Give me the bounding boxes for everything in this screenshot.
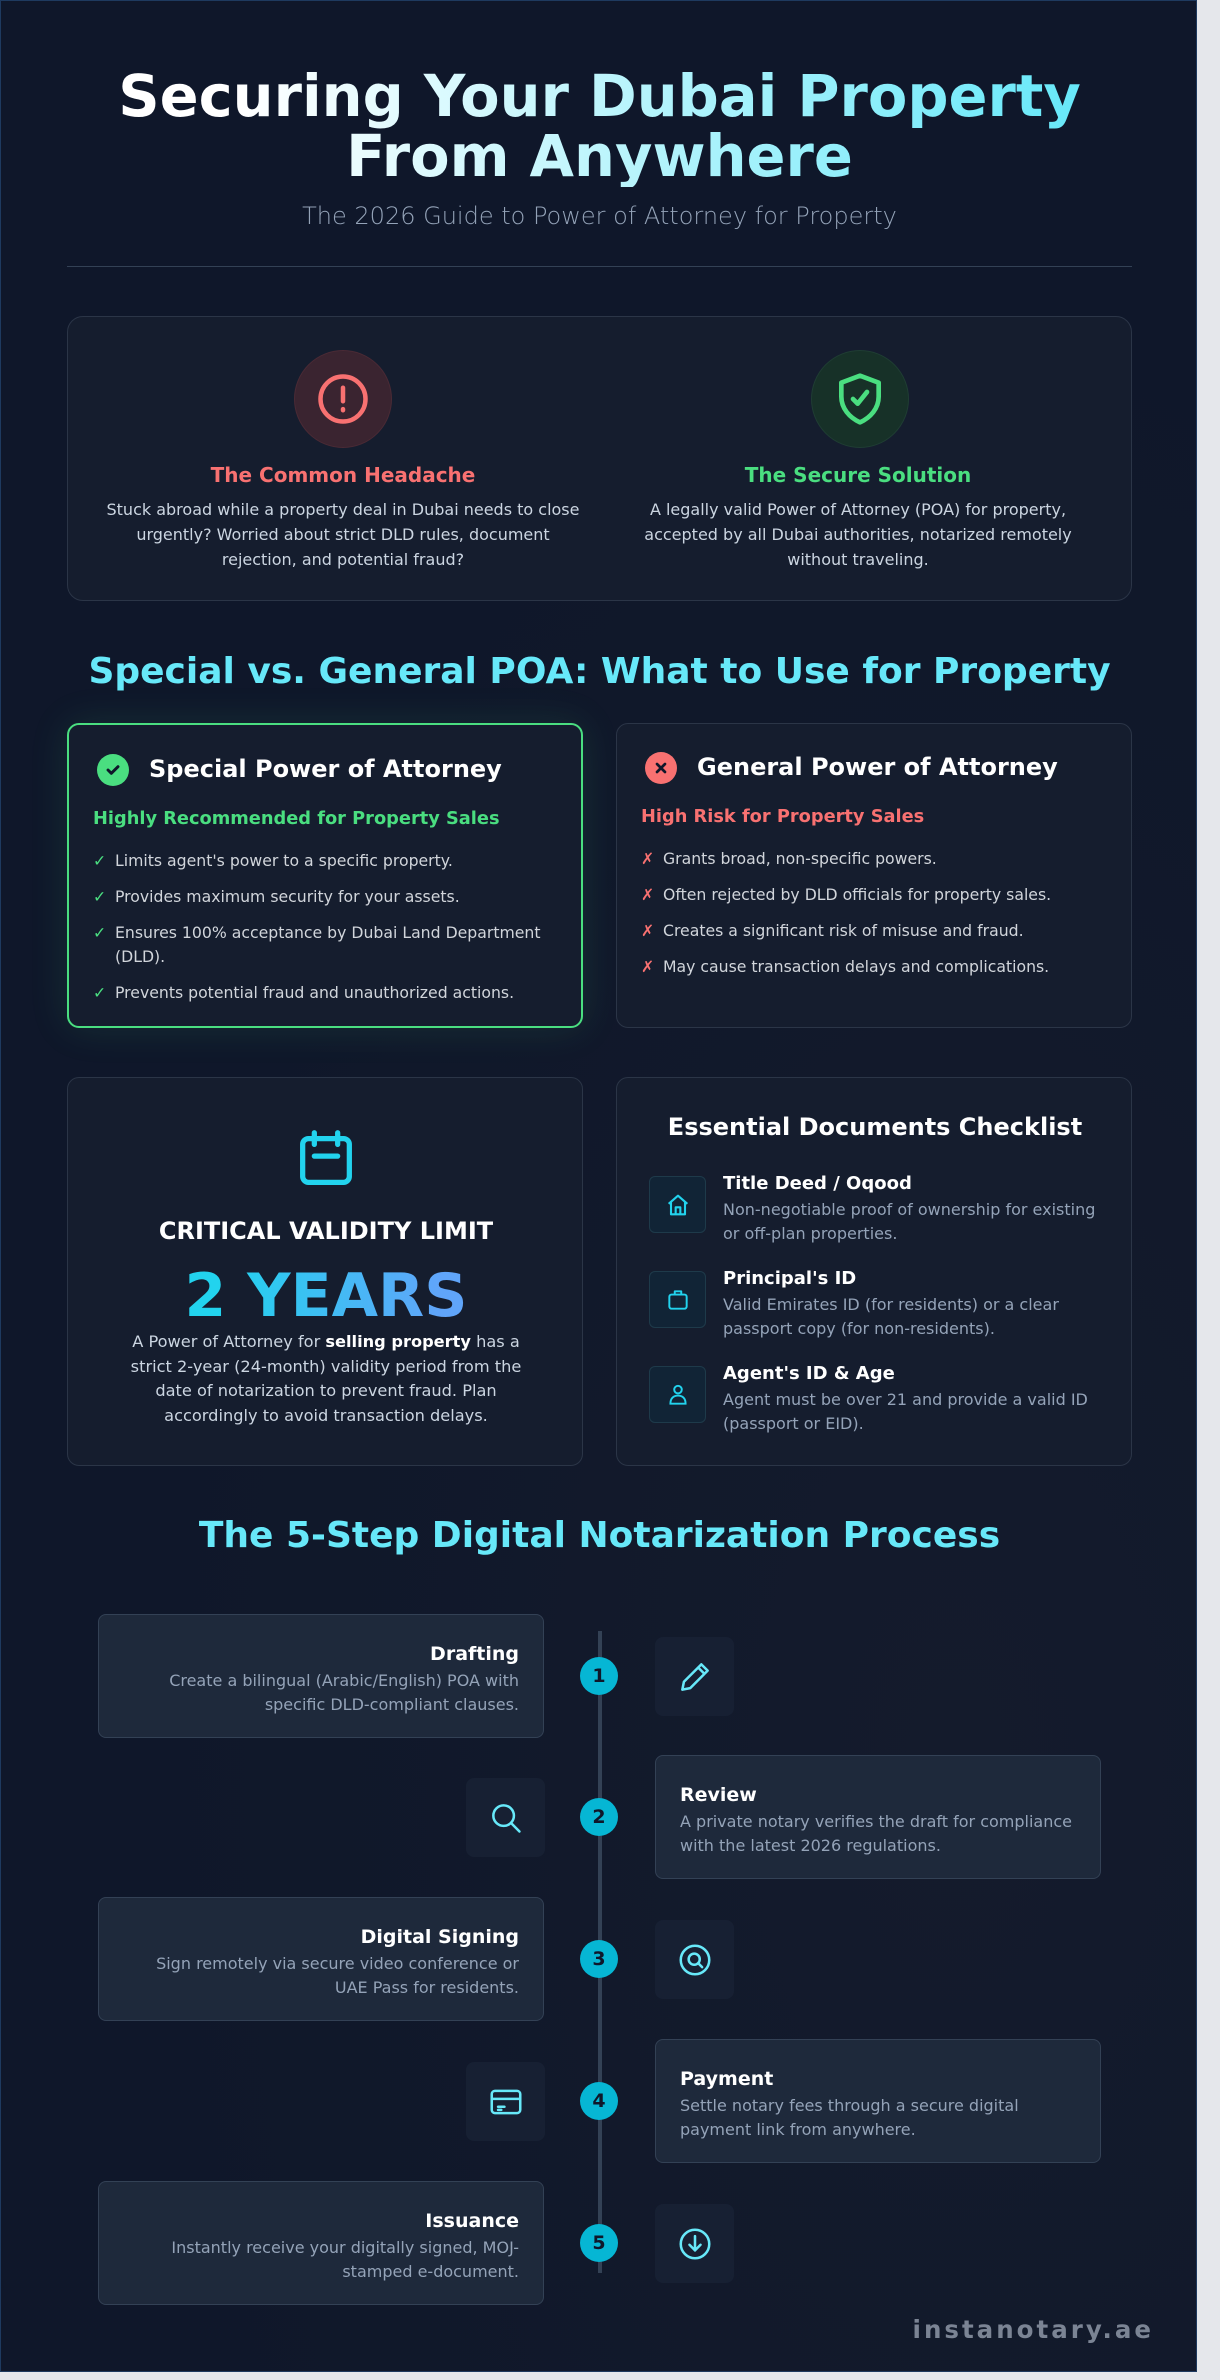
icon: check — [97, 754, 129, 786]
step 1: Drafting — [430, 1643, 519, 1665]
subtitle: The 2026 Guide to Power of Attorney for Property — [302, 202, 897, 230]
heading: special vs general: Special vs. General POA: What to Use for Property — [88, 651, 1111, 692]
panel: general POA — [616, 723, 1132, 1028]
step 4 — [466, 2039, 1101, 2163]
list: ✓ — [93, 887, 106, 906]
step 1: 1 — [592, 1665, 606, 1687]
list: ✗ — [641, 921, 654, 940]
subheading: Highly Recommended for Property Sales — [93, 808, 500, 829]
doc item: title deed — [649, 1173, 1095, 1243]
step 3: Sign remotely via secure video conference or UAE Pass for residents. — [156, 1954, 519, 1997]
title — [1, 67, 1198, 187]
list: Ensures 100% acceptance by Dubai Land Department (DLD). — [115, 923, 541, 966]
icon: shield — [811, 350, 909, 448]
step 2 — [466, 1755, 1101, 1879]
step 2: Review — [680, 1784, 757, 1806]
footer brand: instanotary.ae — [913, 2315, 1154, 2344]
list — [93, 851, 541, 1002]
step 1 — [98, 1614, 709, 1738]
heading: solution: The Secure Solution — [745, 463, 971, 487]
heading: Essential Documents Checklist — [668, 1113, 1082, 1141]
heading: CRITICAL VALIDITY LIMIT — [159, 1217, 493, 1245]
step 3: 3 — [592, 1948, 606, 1970]
text: headache: Stuck abroad while a property deal in Dubai needs to close urgently? Worried about strict DLD rules, document rejection, and potential fraud? — [106, 500, 579, 569]
big number — [68, 1258, 584, 1334]
heading: 5-step process: The 5-Step Digital Notarization Process — [199, 1515, 1000, 1556]
list: Creates a significant risk of misuse and fraud. — [663, 921, 1024, 940]
doc item: agent ID: Agent must be over 21 and provide a valid ID (passport or EID). — [723, 1390, 1088, 1433]
doc item: principal ID: Valid Emirates ID (for residents) or a clear passport copy (for non-residents). — [723, 1295, 1059, 1338]
doc item: title deed: Non-negotiable proof of ownership for existing or off-plan properties. — [723, 1200, 1095, 1243]
step 5: Instantly receive your digitally signed, MOJ-stamped e-document. — [171, 2238, 519, 2281]
text: solution: A legally valid Power of Attorney (POA) for property, accepted by all Dubai authorities, notarized remotely without traveling. — [644, 500, 1072, 569]
title: From Anywhere — [346, 123, 853, 190]
list: ✓ — [93, 923, 106, 942]
icon: warning — [294, 350, 392, 448]
panel: documents checklist — [616, 1077, 1132, 1466]
list: Provides maximum security for your assets. — [115, 887, 460, 906]
icon: calendar — [300, 1130, 352, 1185]
list: Limits agent's power to a specific property. — [115, 851, 453, 870]
list — [641, 849, 1051, 976]
step 1: Create a bilingual (Arabic/English) POA with specific DLD-compliant clauses. — [169, 1671, 519, 1714]
list: ✓ — [93, 851, 106, 870]
list: Prevents potential fraud and unauthorized actions. — [115, 983, 514, 1002]
paragraph: A Power of Attorney for selling property has a strict 2-year (24-month) validity period from the date of notarization to prevent fraud. Plan accordingly to avoid transaction delays. — [131, 1332, 521, 1424]
icon: cross — [645, 752, 677, 784]
doc item: title deed: Title Deed / Oqood — [723, 1173, 912, 1194]
step 5: 5 — [592, 2232, 606, 2254]
step 5: Issuance — [425, 2210, 519, 2232]
step 4: Payment — [680, 2068, 773, 2090]
doc item: principal ID: Principal's ID — [723, 1268, 856, 1289]
list: ✓ — [93, 983, 106, 1002]
step 4: Settle notary fees through a secure digital payment link from anywhere. — [680, 2096, 1019, 2139]
list: ✗ — [641, 849, 654, 868]
panel: validity — [67, 1077, 583, 1466]
panel: special POA — [67, 723, 583, 1028]
step 5 — [98, 2181, 710, 2305]
list: ✗ — [641, 957, 654, 976]
heading: Special Power of Attorney — [149, 755, 502, 783]
heading: General Power of Attorney — [697, 753, 1058, 781]
step 4: 4 — [592, 2090, 606, 2112]
step 2: 2 — [592, 1806, 606, 1828]
list: Often rejected by DLD officials for property sales. — [663, 885, 1051, 904]
subheading: High Risk for Property Sales — [641, 806, 924, 827]
panel: problem and solution — [67, 316, 1132, 601]
step 3: Digital Signing — [361, 1926, 519, 1948]
step 2: A private notary verifies the draft for compliance with the latest 2026 regulations. — [680, 1812, 1072, 1855]
step 3 — [98, 1897, 710, 2021]
list: Grants broad, non-specific powers. — [663, 849, 937, 868]
heading: headache: The Common Headache — [211, 463, 475, 487]
list: ✗ — [641, 885, 654, 904]
big number: 2 YEARS — [185, 1261, 467, 1331]
doc item: principal ID — [649, 1268, 1059, 1338]
title: Securing Your Dubai Property — [118, 63, 1081, 130]
doc item: agent ID — [649, 1363, 1088, 1433]
list: May cause transaction delays and complications. — [663, 957, 1049, 976]
doc item: agent ID: Agent's ID & Age — [723, 1363, 895, 1384]
